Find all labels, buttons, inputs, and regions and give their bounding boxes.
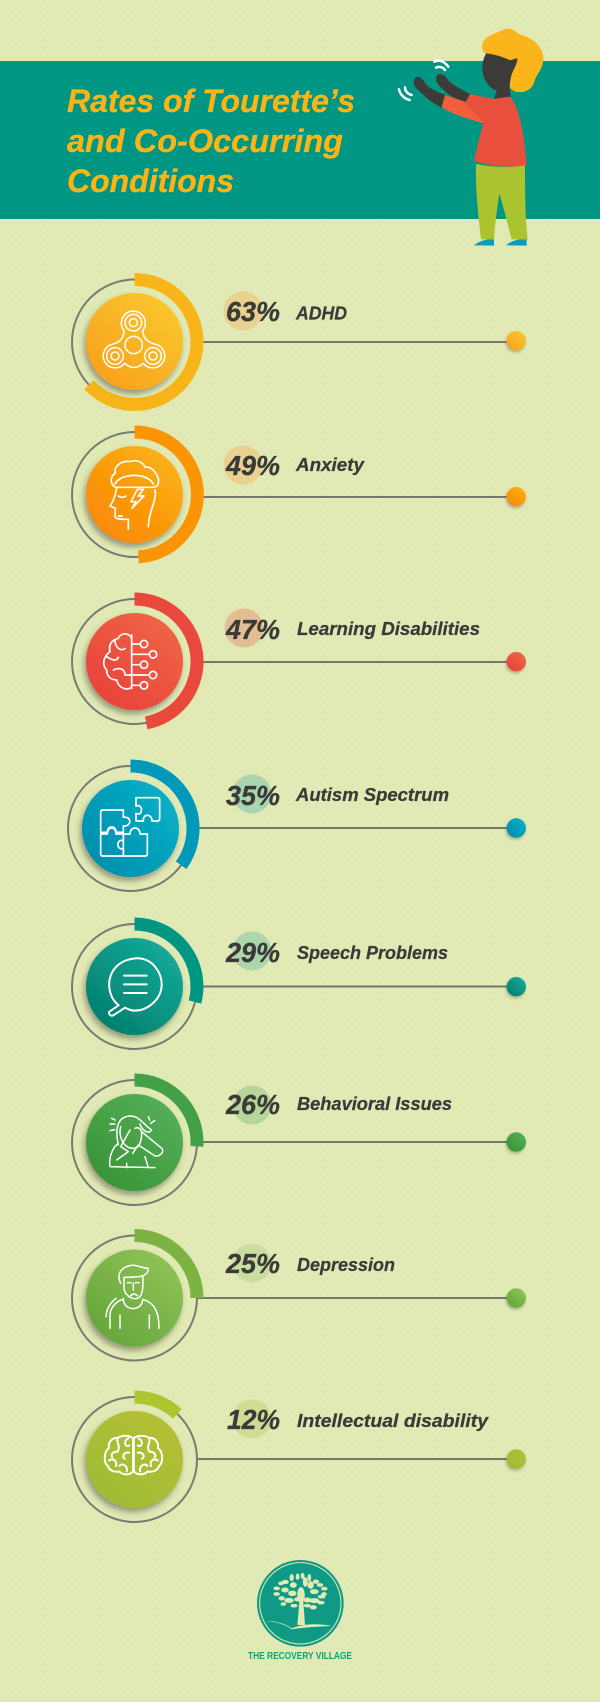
gray ring	[68, 766, 193, 891]
legs and shoes	[474, 164, 528, 246]
connector line and end dot	[197, 977, 526, 996]
gray ring	[72, 432, 197, 557]
progress arc 63%	[89, 280, 197, 404]
header banner	[0, 61, 600, 219]
icon disc	[86, 293, 183, 390]
label: Speech Problems	[297, 943, 448, 963]
progress arc 25%	[134, 1236, 197, 1298]
connector line and end dot	[197, 331, 526, 350]
logo: The Recovery Village	[248, 1560, 352, 1662]
label: ADHD	[295, 303, 347, 323]
icon disc	[82, 780, 179, 877]
icon: brain circuit	[104, 634, 157, 689]
gray ring	[72, 280, 197, 404]
row: Learning Disabilities 47%	[72, 599, 526, 724]
title: Rates of Tourette’s	[67, 83, 355, 119]
row: Intellectual disability 12%	[72, 1397, 526, 1522]
icon: fidget spinner	[103, 311, 165, 368]
label: Depression	[297, 1255, 395, 1275]
label: Intellectual disability	[297, 1411, 489, 1431]
row: Anxiety 49%	[72, 432, 526, 557]
row: Depression 25%	[72, 1236, 526, 1360]
connector line and end dot	[197, 487, 526, 506]
illustration: person with tic gestures	[399, 30, 542, 246]
label: Behavioral Issues	[297, 1094, 452, 1114]
progress arc 29%	[134, 924, 197, 1002]
progress arc 47%	[134, 599, 197, 723]
icon disc	[86, 446, 183, 543]
row: Autism Spectrum 35%	[68, 766, 526, 891]
percent bubble	[224, 292, 262, 330]
percent value: 26%	[225, 1089, 280, 1120]
percent bubble	[232, 1244, 272, 1282]
icon: speech bubble	[109, 958, 162, 1016]
connector line and end dot	[197, 1132, 526, 1152]
percent value: 49%	[225, 450, 280, 481]
percent value: 47%	[225, 614, 280, 645]
label: Learning Disabilities	[297, 619, 480, 639]
icon disc	[86, 613, 183, 710]
percent bubble	[224, 446, 262, 484]
percent bubble	[232, 932, 272, 970]
percent bubble	[224, 608, 264, 648]
icon: brain	[105, 1436, 162, 1474]
percent bubble	[232, 1086, 272, 1124]
progress arc 49%	[134, 432, 197, 557]
percent value: 12%	[227, 1404, 280, 1435]
icon disc	[86, 1094, 183, 1191]
logo wordmark: THE RECOVERY VILLAGE	[248, 1650, 352, 1662]
gray ring	[72, 1236, 197, 1360]
icon: puzzle pieces	[101, 798, 160, 856]
gray ring	[72, 599, 197, 724]
percent value: 29%	[225, 937, 280, 968]
icon: sad man	[106, 1265, 159, 1328]
icon disc	[86, 1411, 183, 1508]
row: ADHD 63%	[72, 280, 526, 404]
percent bubble	[232, 1400, 272, 1438]
logo badge with tree	[257, 1560, 344, 1647]
connector line and end dot	[197, 1288, 526, 1308]
icon: head with storm cloud	[110, 461, 159, 529]
connector line and end dot	[193, 818, 526, 838]
percent value: 35%	[226, 780, 280, 811]
progress arc 12%	[134, 1397, 177, 1414]
percent value: 63%	[226, 296, 280, 327]
connector line and end dot	[197, 1449, 526, 1469]
label: Autism Spectrum	[295, 785, 449, 805]
icon disc	[86, 938, 183, 1035]
gray ring	[72, 1080, 197, 1205]
row: Speech Problems 29%	[72, 924, 526, 1049]
upper body, head and hands	[399, 30, 542, 167]
percent bubble	[232, 774, 272, 814]
connector line and end dot	[197, 652, 526, 671]
row: Behavioral Issues 26%	[72, 1080, 526, 1205]
progress arc 35%	[130, 766, 193, 865]
title: Conditions	[67, 163, 234, 199]
icon disc	[86, 1250, 183, 1346]
label: Anxiety	[295, 455, 365, 475]
gray ring	[72, 924, 197, 1049]
title: and Co-Occurring	[67, 123, 343, 159]
title	[67, 83, 355, 199]
percent value: 25%	[225, 1248, 280, 1279]
icon: stressed person	[110, 1116, 163, 1168]
progress arc 26%	[134, 1080, 197, 1146]
gray ring	[72, 1397, 197, 1522]
